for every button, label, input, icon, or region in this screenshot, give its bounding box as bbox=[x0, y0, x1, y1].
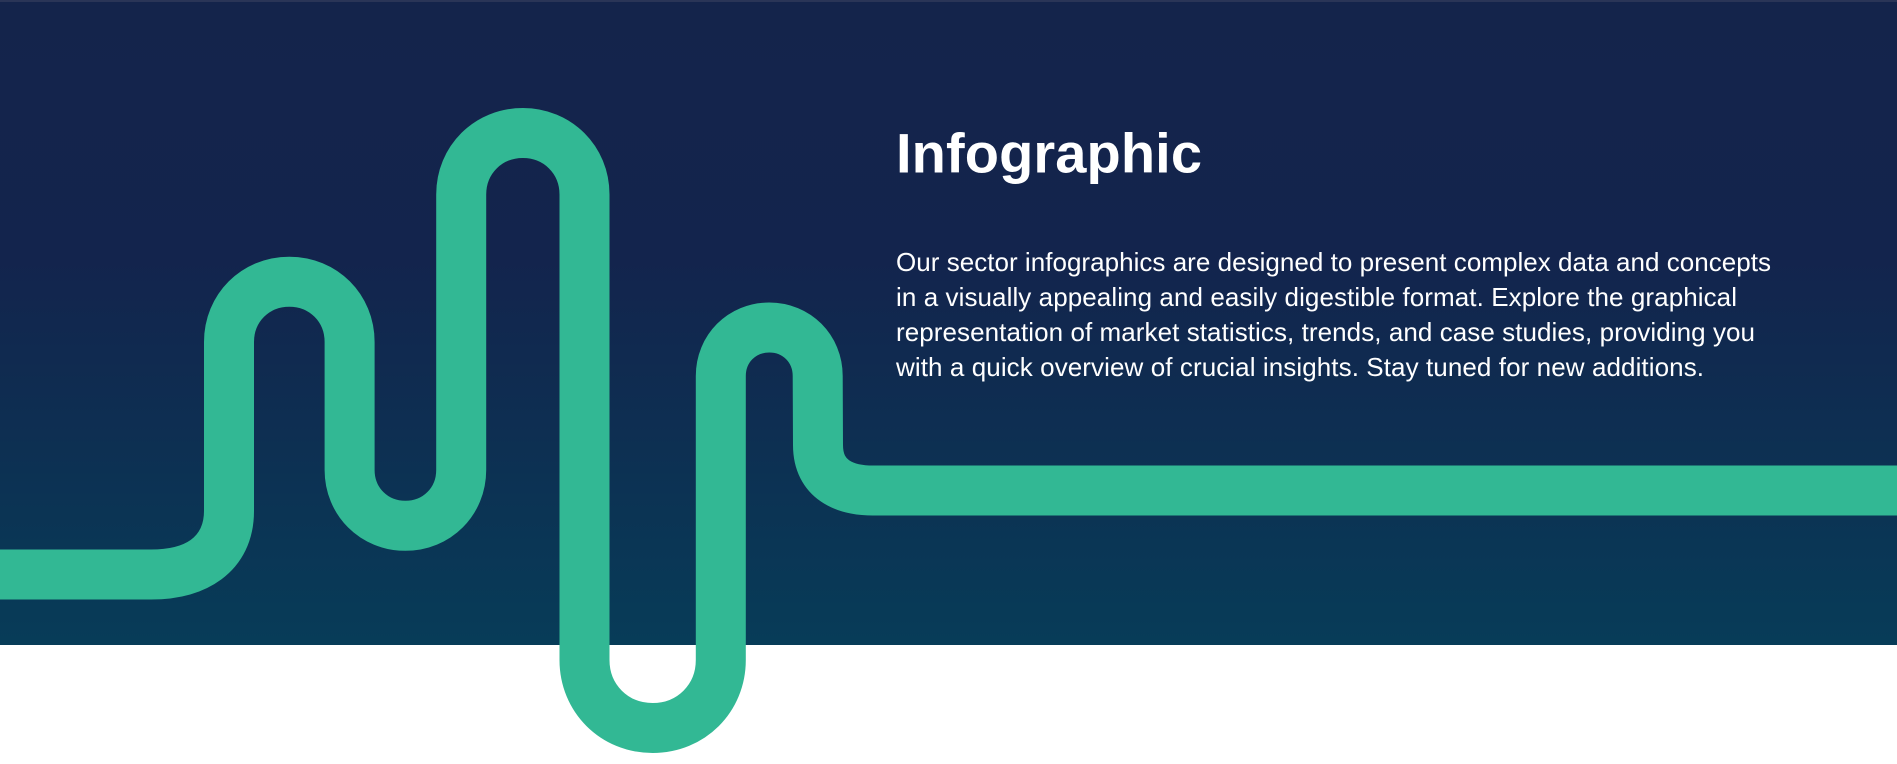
green winding line bbox=[0, 133, 1897, 728]
title: Infographic bbox=[896, 122, 1202, 184]
description text bbox=[895, 247, 1771, 382]
description text: Our sector infographics are designed to present complex data and concepts bbox=[896, 247, 1771, 277]
description text: in a visually appealing and easily digestible format. Explore the graphical bbox=[896, 282, 1737, 312]
description text: with a quick overview of crucial insights. Stay tuned for new additions. bbox=[895, 352, 1704, 382]
description text: representation of market statistics, trends, and case studies, providing you bbox=[896, 317, 1755, 347]
